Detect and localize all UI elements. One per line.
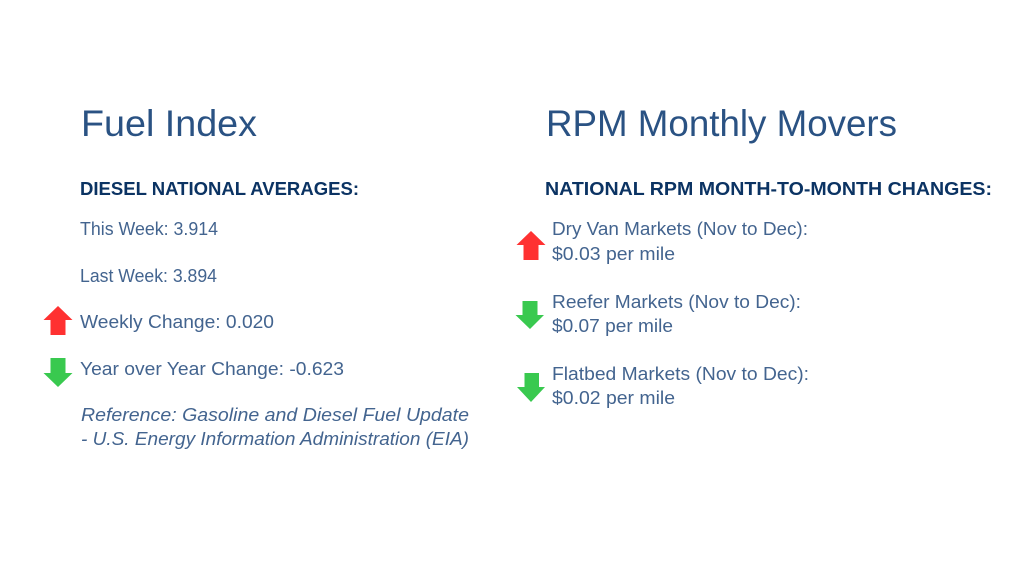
panel: rpm monthly movers bbox=[516, 103, 992, 408]
panel: fuel index bbox=[44, 103, 469, 449]
icon: red up arrow, dry van bbox=[516, 231, 546, 260]
text: year over year change: Year over Year Change: -0.623 bbox=[80, 359, 344, 379]
text: reference: - U.S. Energy Information Administration (EIA) bbox=[81, 429, 469, 449]
text: flatbed markets: $0.02 per mile bbox=[552, 388, 675, 408]
text: this week: This Week: 3.914 bbox=[80, 219, 218, 239]
icon: green down arrow, flatbed bbox=[517, 373, 545, 402]
text: last week: Last Week: 3.894 bbox=[80, 266, 217, 286]
icon: green down arrow, year over year change bbox=[44, 358, 72, 387]
text: reefer markets bbox=[552, 292, 801, 336]
text: flatbed markets: Flatbed Markets (Nov to Dec): bbox=[552, 364, 809, 384]
text: dry van markets: Dry Van Markets (Nov to Dec): bbox=[552, 219, 808, 239]
text: reference: Reference: Gasoline and Diesel Fuel Update bbox=[81, 405, 469, 425]
icon: green down arrow, reefer bbox=[516, 301, 544, 329]
text: weekly change: Weekly Change: 0.020 bbox=[80, 312, 274, 332]
text: dry van markets bbox=[552, 219, 808, 264]
icon: red up arrow, weekly change bbox=[44, 306, 72, 335]
subheading: diesel national averages: DIESEL NATIONAL AVERAGES: bbox=[80, 178, 359, 199]
text: reefer markets: $0.07 per mile bbox=[552, 316, 673, 336]
heading: rpm monthly movers: RPM Monthly Movers bbox=[546, 103, 897, 144]
text: reference bbox=[81, 405, 469, 449]
heading: fuel index: Fuel Index bbox=[81, 103, 257, 144]
text: reefer markets: Reefer Markets (Nov to Dec): bbox=[552, 292, 801, 312]
subheading: national rpm changes: NATIONAL RPM MONTH-TO-MONTH CHANGES: bbox=[545, 178, 992, 199]
text: dry van markets: $0.03 per mile bbox=[552, 244, 675, 264]
text: flatbed markets bbox=[552, 364, 809, 408]
